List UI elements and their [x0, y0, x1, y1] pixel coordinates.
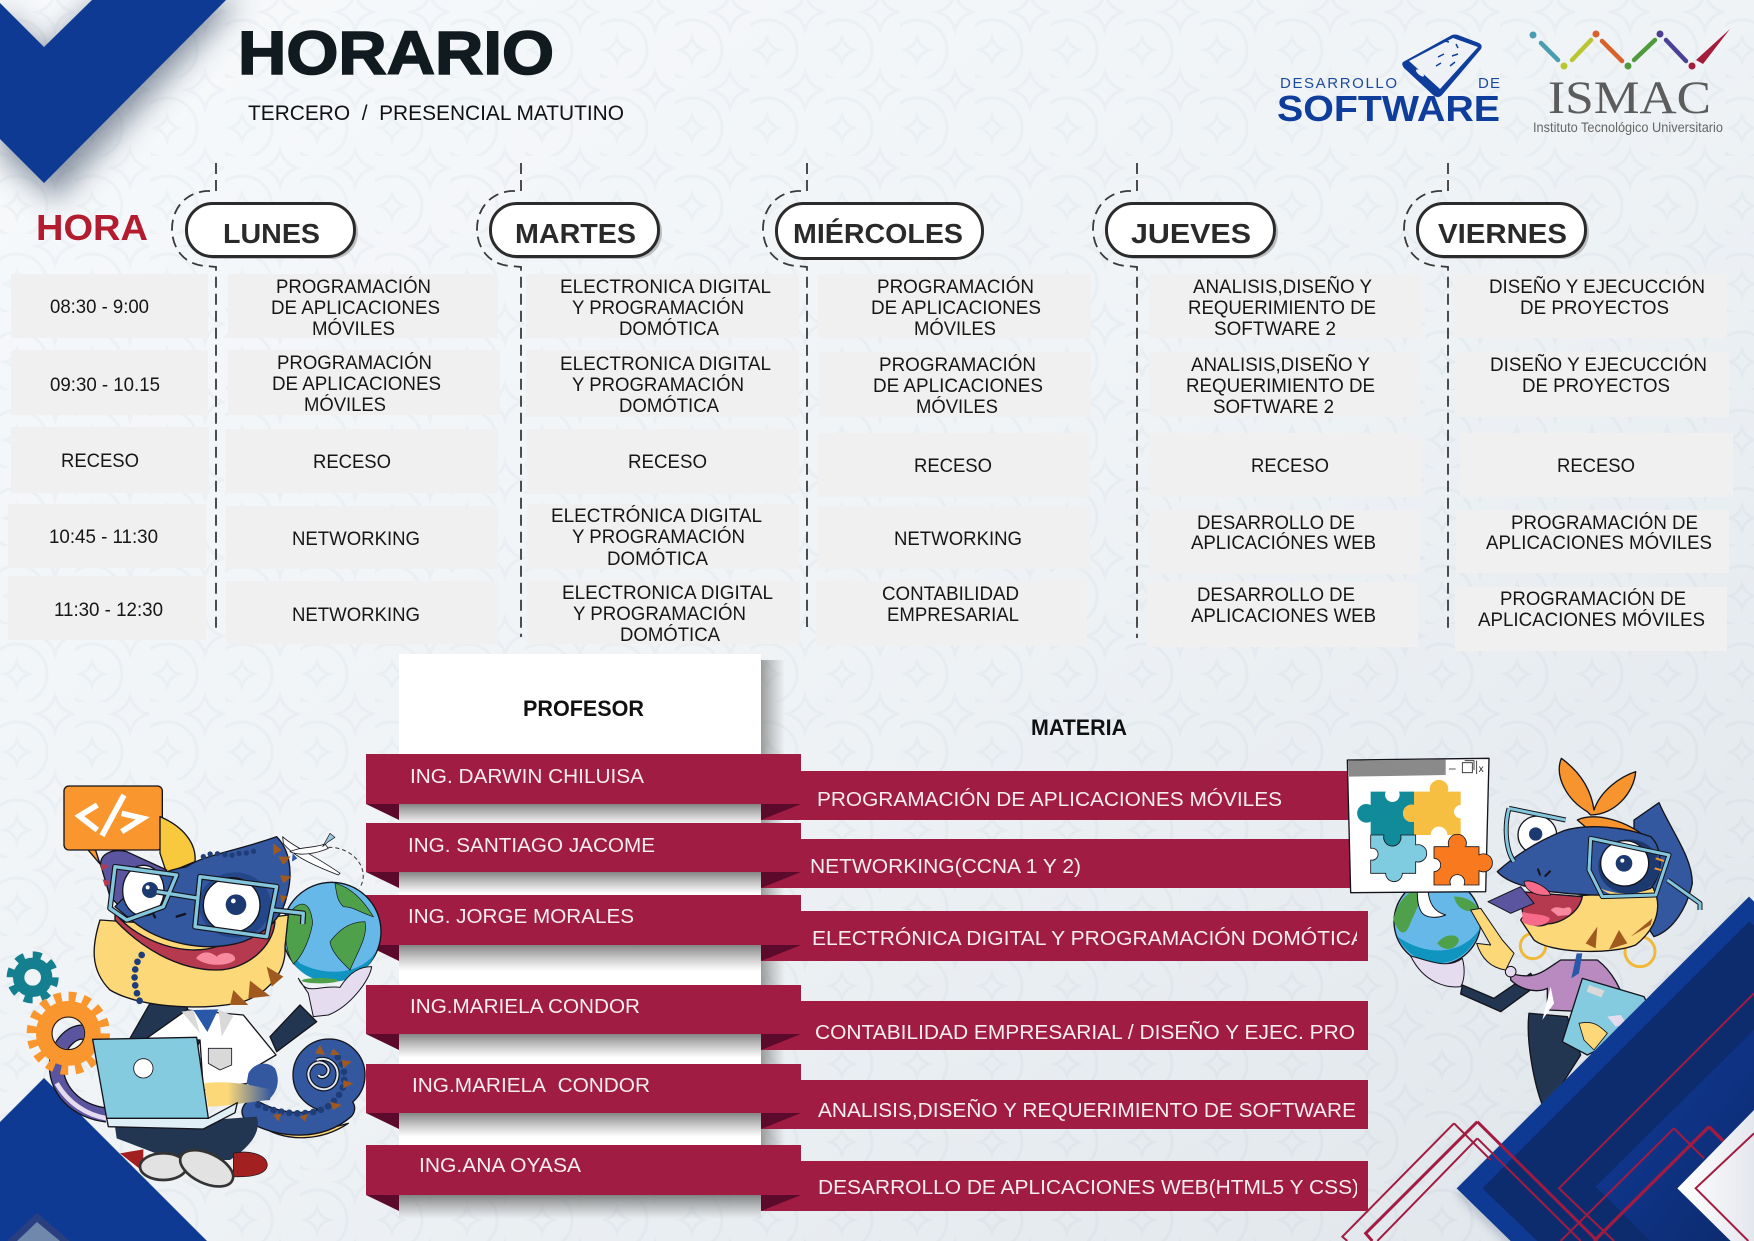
column: viernes: PROGRAMACIÓN DE: [1511, 512, 1698, 534]
column: martes: ELECTRONICA DIGITAL: [560, 354, 771, 375]
column: hora: 11:30 - 12:30: [54, 600, 163, 621]
day pills: [186, 204, 1589, 259]
day separators: [172, 163, 1448, 638]
column: viernes: DISEÑO Y EJECUCCIÓN: [1490, 354, 1707, 376]
column: miércoles: [816, 274, 1091, 646]
column: martes: Y PROGRAMACIÓN: [573, 603, 746, 625]
ribbon: networking: [761, 839, 1361, 888]
column: viernes: DE PROYECTOS: [1520, 298, 1669, 319]
icon: smartphone: [1402, 34, 1482, 97]
column: martes: Y PROGRAMACIÓN: [572, 526, 745, 548]
icon: code speech bubble: [64, 786, 162, 864]
corner shapes: red outlines: [1342, 993, 1754, 1241]
column: hora: 09:30 - 10.15: [50, 375, 160, 396]
column: viernes: DE PROYECTOS: [1522, 376, 1670, 397]
column: lunes: MÓVILES: [304, 394, 386, 416]
column: viernes: DISEÑO Y EJECUCCIÓN: [1489, 276, 1705, 298]
ribbons: materia: [761, 771, 1368, 1211]
ribbon: Jorge Morales: ING. JORGE MORALES: [408, 906, 634, 928]
column: jueves: [1147, 274, 1421, 647]
column: miércoles: CONTABILIDAD: [882, 584, 1019, 605]
globe: [1393, 878, 1481, 965]
column: jueves: REQUERIMIENTO DE: [1188, 298, 1376, 319]
column: jueves: ANALISIS,DISEÑO Y: [1191, 354, 1370, 376]
head: [94, 837, 292, 1007]
column: hora: 10:45 - 11:30: [49, 527, 158, 548]
tail: [253, 1039, 365, 1138]
column: viernes: APLICACIONES MÓVILES: [1478, 609, 1705, 631]
schedule table: [8, 274, 1733, 651]
column: miércoles: PROGRAMACIÓN: [879, 354, 1036, 376]
logo: Desarrollo de Software: SOFTWARE: [1277, 88, 1500, 129]
heading: materia: MATERIA: [1031, 715, 1127, 740]
title: HORARIO: [238, 19, 554, 88]
ribbon: programación: PROGRAMACIÓN DE APLICACIONES MÓVILES: [817, 788, 1282, 811]
ribbon: Darwin Chiluisa: [366, 754, 801, 826]
illustration: chameleon teacher: [1342, 758, 1754, 1241]
back of head: [101, 851, 167, 920]
pill: Martes: MARTES: [515, 218, 636, 249]
logo: ISMAC: ISMAC: [1548, 72, 1711, 124]
column: lunes: DE APLICACIONES: [271, 298, 440, 319]
puzzle pieces: [1357, 780, 1492, 885]
column: martes: DOMÓTICA: [607, 548, 708, 570]
pill: Viernes: [1418, 204, 1589, 259]
column: miércoles: RECESO: [914, 456, 992, 477]
column: jueves: DESARROLLO DE: [1197, 585, 1355, 606]
pill: Miércoles: [776, 204, 982, 258]
column: hora: 08:30 - 9:00: [50, 297, 149, 318]
airplane: [283, 833, 363, 888]
logo: ISMAC: Instituto Tecnológico Universitario: [1533, 119, 1723, 135]
ribbon: Ana Oyasa: ING.ANA OYASA: [419, 1155, 582, 1177]
column: miércoles: PROGRAMACIÓN: [877, 276, 1034, 298]
column: jueves: APLICACIÓNES WEB: [1191, 532, 1376, 554]
column: martes: ELECTRONICA DIGITAL: [560, 277, 771, 298]
column: miércoles: EMPRESARIAL: [887, 605, 1019, 626]
head face: [1488, 827, 1664, 951]
ribbon: Santiago Jacome: [366, 823, 801, 894]
ribbon: contabilidad: [761, 1001, 1368, 1050]
earrings: [1520, 933, 1655, 967]
glasses: [110, 867, 303, 937]
illustration: chameleon developer: [11, 786, 381, 1194]
panel: profesor column: PROFESOR: [523, 696, 644, 721]
column: jueves: RECESO: [1251, 456, 1329, 477]
pill: Martes: [490, 204, 662, 259]
back tail: [56, 1032, 107, 1118]
panel: corner triangle bottom-left: [0, 1078, 207, 1241]
column: lunes: PROGRAMACIÓN: [276, 276, 431, 298]
ribbon: análisis: [761, 1080, 1368, 1129]
column: jueves: APLICACIONES WEB: [1191, 606, 1376, 627]
ribbon: electrónica: [761, 911, 1368, 961]
column: hora: [8, 274, 209, 640]
column: miércoles: DE APLICACIONES: [873, 376, 1043, 397]
ribbon: Mariela Condor 2: [366, 1064, 801, 1137]
column: viernes: APLICACIONES MÓVILES: [1486, 532, 1712, 554]
column: martes: DOMÓTICA: [619, 395, 719, 417]
ribbon: desarrollo: [761, 1161, 1368, 1211]
arm and hand: [1411, 956, 1537, 1012]
left eye: [1518, 816, 1557, 854]
column: miércoles: MÓVILES: [914, 318, 996, 340]
pill: Miércoles: MIÉRCOLES: [793, 218, 963, 249]
icon: coloured zigzag: [1530, 29, 1730, 70]
hand: [298, 967, 372, 1017]
subtitle: TERCERO / PRESENCIAL MATUTINO: [248, 102, 624, 125]
legs and shoes: [115, 1117, 267, 1194]
logo: Desarrollo de Software: DE: [1478, 75, 1500, 92]
ribbon: Mariela Condor 2: ING.MARIELA CONDOR: [412, 1075, 650, 1097]
column: martes: ELECTRONICA DIGITAL: [562, 583, 773, 604]
ribbon: Mariela Condor: [366, 985, 801, 1058]
column: lunes: [226, 274, 500, 644]
ribbon: desarrollo: DESARROLLO DE APLICACIONES WEB(HTML5 Y CSS): [818, 1177, 1359, 1199]
ribbons: profesor: [366, 754, 801, 1219]
laptop: [93, 1037, 237, 1129]
ribbon: Jorge Morales: [366, 895, 801, 971]
panel: profesor column: [399, 654, 785, 1148]
pill: Viernes: VIERNES: [1438, 218, 1567, 249]
column: martes: DOMÓTICA: [620, 624, 720, 646]
column: jueves: ANALISIS,DISEÑO Y: [1193, 276, 1372, 298]
pill: Jueves: [1106, 204, 1278, 259]
corner shapes: blue bands: [1457, 897, 1754, 1241]
column: lunes: RECESO: [313, 452, 391, 473]
column: martes: RECESO: [628, 452, 707, 473]
globe: [282, 882, 381, 983]
column: jueves: SOFTWARE 2: [1214, 319, 1336, 340]
column: lunes: PROGRAMACIÓN: [277, 352, 432, 374]
column: martes: ELECTRÓNICA DIGITAL: [551, 505, 762, 527]
corner decoration: top-left blue chevron: [0, 0, 240, 200]
ribbon: contabilidad: CONTABILIDAD EMPRESARIAL / DISEÑO Y EJEC. PRO: [815, 1020, 1355, 1044]
icon: gears: [11, 956, 105, 1070]
puzzle window: x: [1479, 764, 1484, 775]
hair bow: [1559, 758, 1649, 840]
ribbon: Ana Oyasa: [366, 1145, 801, 1219]
column: jueves: REQUERIMIENTO DE: [1186, 376, 1375, 397]
column: viernes: PROGRAMACIÓN DE: [1500, 588, 1686, 610]
body: [1471, 908, 1647, 1105]
ribbon: Santiago Jacome: ING. SANTIAGO JACOME: [408, 835, 655, 857]
column: jueves: SOFTWARE 2: [1213, 397, 1334, 418]
pill: Lunes: [186, 204, 358, 259]
column: viernes: [1453, 274, 1733, 651]
column: martes: [526, 274, 800, 646]
column: lunes: NETWORKING: [292, 529, 420, 550]
logo: Desarrollo de Software: DESARROLLO: [1280, 75, 1397, 92]
glasses: [1506, 808, 1700, 910]
column: viernes: RECESO: [1557, 456, 1635, 477]
logo: Desarrollo de Software: [1277, 34, 1500, 129]
body: [130, 1003, 317, 1107]
column: martes: Y PROGRAMACIÓN: [572, 374, 744, 396]
back head: [1634, 803, 1692, 937]
logo: ISMAC: [1530, 29, 1730, 135]
ribbon: Mariela Condor: ING.MARIELA CONDOR: [410, 996, 640, 1018]
pill: Lunes: LUNES: [223, 218, 320, 249]
ribbon: networking: NETWORKING(CCNA 1 Y 2): [810, 856, 1081, 878]
hard hat: [160, 817, 195, 873]
column: lunes: NETWORKING: [292, 605, 420, 626]
column: hora: RECESO: [61, 451, 139, 472]
column: miércoles: NETWORKING: [894, 529, 1022, 550]
ribbon: electrónica: ELECTRÓNICA DIGITAL Y PROGRAMACIÓN DOMÓTICA: [812, 927, 1366, 950]
ribbon: programación: [761, 771, 1361, 820]
column: martes: Y PROGRAMACIÓN: [572, 297, 744, 319]
column: miércoles: MÓVILES: [916, 396, 998, 418]
column: miércoles: DE APLICACIONES: [871, 298, 1041, 319]
ribbon: análisis: ANALISIS,DISEÑO Y REQUERIMIENTO DE SOFTWARE: [818, 1098, 1356, 1122]
heading: HORA: HORA: [36, 207, 148, 248]
column: lunes: MÓVILES: [312, 318, 395, 340]
pill: Jueves: JUEVES: [1131, 218, 1251, 249]
column: lunes: DE APLICACIONES: [272, 374, 441, 395]
ribbon: Darwin Chiluisa: ING. DARWIN CHILUISA: [410, 766, 645, 788]
column: jueves: DESARROLLO DE: [1197, 513, 1355, 534]
puzzle window: [1347, 758, 1492, 917]
column: martes: DOMÓTICA: [619, 318, 719, 340]
